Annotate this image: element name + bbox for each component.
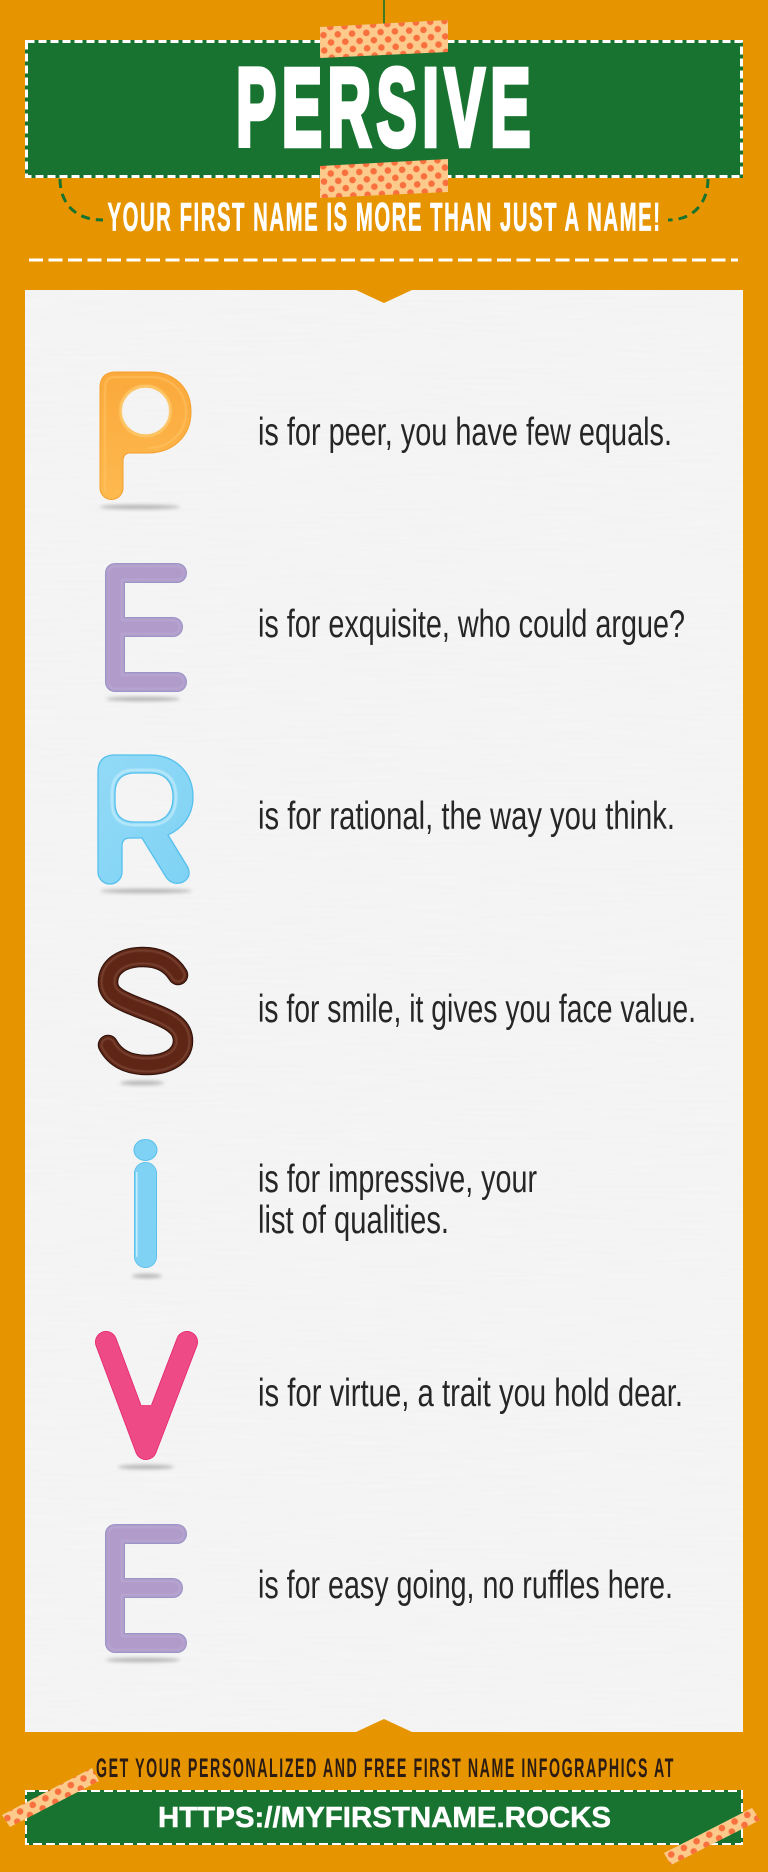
content panel	[25, 290, 743, 1732]
tape: bottom	[320, 159, 448, 198]
row: V	[106, 1342, 683, 1469]
tape: footer right	[664, 1808, 760, 1865]
letter V	[106, 1342, 187, 1469]
letter S	[108, 957, 183, 1085]
row: S	[108, 957, 696, 1085]
hanging line	[383, 0, 385, 24]
letter R	[98, 755, 193, 893]
row: P	[100, 372, 672, 509]
notch: top	[356, 290, 412, 303]
dashed connector: left	[60, 179, 103, 220]
tape: footer left	[2, 1768, 99, 1827]
tape: top	[320, 20, 448, 58]
row: R	[98, 755, 675, 893]
text	[258, 1158, 537, 1242]
row: E (second)	[106, 1534, 673, 1662]
letter E	[106, 573, 180, 701]
dashed connector: right	[668, 179, 708, 220]
letter E	[106, 1534, 180, 1662]
text: is for impressive, your	[258, 1158, 537, 1201]
row: E	[106, 573, 685, 701]
letter i	[132, 1140, 162, 1278]
row: I	[132, 1140, 537, 1278]
letter P	[100, 372, 191, 509]
text: list of qualities.	[258, 1199, 449, 1242]
url: HTTPS://MYFIRSTNAME.ROCKS	[158, 1802, 611, 1834]
footer banner	[25, 1790, 743, 1845]
notch: bottom	[356, 1719, 412, 1732]
title: PERSIVE	[236, 46, 536, 170]
title banner	[25, 20, 743, 198]
